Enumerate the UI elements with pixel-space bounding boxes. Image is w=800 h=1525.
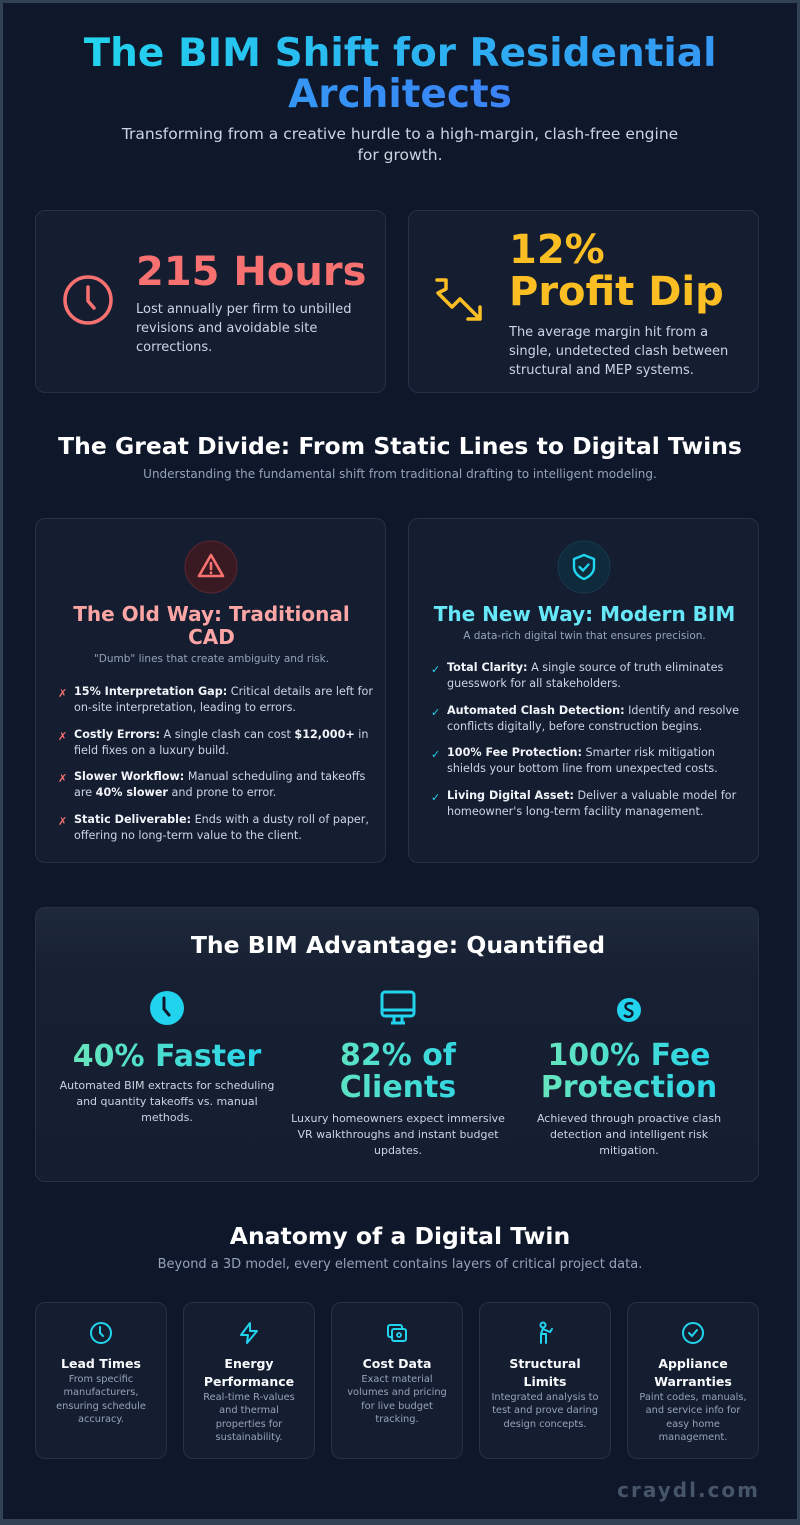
card: energy: Real-time R-values and thermal properties for sustainability.: [203, 1392, 295, 1443]
subtitle: for growth.: [357, 146, 443, 164]
heading: CAD: [188, 625, 235, 649]
card: structural: Integrated analysis to test and prove daring design concepts.: [491, 1392, 599, 1430]
icon: bolt: [240, 1322, 258, 1344]
tagline: "Dumb" lines that create ambiguity and risk.: [94, 653, 329, 665]
stat card: 12% profit dip: [408, 210, 759, 393]
subtitle: Transforming from a creative hurdle to a high-margin, clash-free engine: [122, 125, 678, 143]
stat text: 215 Hours: [136, 249, 366, 295]
list: new way points: Automated Clash Detection: Identify and resolve conflicts digitally, before construction begins.: [447, 704, 739, 732]
icon: monitor: [380, 990, 416, 1024]
stat: 100% fee protection: [537, 998, 721, 1157]
card: structural: Limits: [524, 1374, 566, 1389]
heading: The BIM Advantage: Quantified: [191, 931, 605, 959]
list: new way points: ✓: [431, 748, 440, 761]
watermark: craydl.com: [617, 1478, 760, 1502]
stat: 40% faster: 40% Faster: [73, 1039, 261, 1074]
list: old way points: ✗: [58, 772, 67, 785]
icon: clock: [90, 1322, 112, 1344]
list: new way points: ✓: [431, 706, 440, 718]
list: old way points: Static Deliverable: Ends with a dusty roll of paper, offering no long-term value to the client.: [74, 812, 369, 842]
list: old way points: ✗: [58, 730, 67, 742]
icon: clock filled: [150, 991, 184, 1025]
stat text: Profit Dip: [509, 269, 724, 315]
card: appliance: Appliance Warranties: [654, 1356, 732, 1389]
card: energy: Energy Performance: [204, 1356, 294, 1389]
title: Architects: [288, 72, 512, 117]
card: energy: [183, 1302, 315, 1459]
stat: 82% of clients: 82% of: [340, 1038, 456, 1073]
stat text: The average margin hit from a single, undetected clash between structural and MEP systems.: [509, 325, 728, 378]
list: old way points: ✗: [58, 814, 67, 828]
panel: old way: [35, 518, 386, 863]
stat: 82% of clients: [291, 990, 505, 1157]
stat: 100% fee protection: Achieved through proactive clash detection and intelligent risk mitigation.: [537, 1112, 721, 1157]
list: new way points: [431, 661, 739, 818]
heading: [73, 602, 350, 649]
section subheading: Understanding the fundamental shift from traditional drafting to intelligent modeling.: [143, 467, 657, 481]
card: lead times: From specific manufacturers, ensuring schedule accuracy.: [56, 1374, 146, 1425]
icon: warning: [184, 540, 238, 594]
stat: 100% fee protection: 100% Fee: [547, 1038, 711, 1073]
stat text: Lost annually per firm to unbilled revisions and avoidable site corrections.: [136, 302, 352, 355]
card: cost data: Exact material volumes and pricing for live budget tracking.: [347, 1374, 447, 1425]
icon: clock: [63, 275, 113, 325]
list: new way points: Living Digital Asset: Deliver a valuable model for homeowner's long-term facility management.: [447, 788, 736, 818]
icon: money: [387, 1324, 407, 1342]
icon: trending down: [435, 278, 482, 321]
card: structural: [479, 1302, 611, 1459]
stat: 40% faster: Automated BIM extracts for scheduling and quantity takeoffs vs. manual methods.: [60, 1079, 274, 1124]
card: appliance: Paint codes, manuals, and service info for easy home management.: [639, 1392, 747, 1443]
heading: The Old Way: Traditional: [73, 602, 350, 626]
stat card: 215 hours: [35, 210, 386, 393]
card: lead times: [35, 1302, 167, 1459]
stat text: [136, 249, 366, 355]
icon: check circle: [682, 1322, 704, 1344]
title: [84, 31, 716, 117]
list: old way points: Costly Errors: A single clash can cost $12,000+ in field fixes on a luxury build.: [74, 728, 369, 756]
section subheading: Beyond a 3D model, every element contains layers of critical project data.: [158, 1257, 642, 1272]
list: new way points: 100% Fee Protection: Smarter risk mitigation shields your bottom line from unexpected costs.: [447, 746, 718, 775]
card: lead times: Lead Times: [61, 1356, 141, 1371]
stat: 40% faster: [60, 991, 274, 1124]
list: old way points: ✗: [58, 687, 67, 700]
panel: new way: [408, 518, 759, 863]
section heading: great divide: The Great Divide: From Static Lines to Digital Twins: [58, 432, 742, 460]
stat text: [508, 227, 728, 378]
card: structural: Structural: [509, 1356, 581, 1371]
section heading: anatomy: Anatomy of a Digital Twin: [230, 1222, 570, 1250]
stat: 100% fee protection: Protection: [541, 1070, 717, 1105]
stat: 82% of clients: Luxury homeowners expect immersive VR walkthroughs and instant budget updates.: [291, 1112, 505, 1157]
icon: figure: [540, 1322, 553, 1344]
panel: BIM advantage: [35, 907, 759, 1182]
stat: 82% of clients: Clients: [340, 1070, 456, 1105]
list: new way points: Total Clarity: A single source of truth eliminates guesswork for all stakeholders.: [447, 661, 723, 690]
list: old way points: 15% Interpretation Gap: Critical details are left for on-site interpretation, leading to errors.: [74, 685, 373, 714]
list: old way points: Slower Workflow: Manual scheduling and takeoffs are 40% slower and prone to error.: [74, 770, 365, 799]
list: new way points: ✓: [431, 790, 440, 804]
card: cost data: Cost Data: [363, 1356, 431, 1371]
card: cost data: [331, 1302, 463, 1459]
list: new way points: ✓: [431, 663, 440, 676]
title: The BIM Shift for Residential: [84, 31, 716, 76]
card: appliance: [627, 1302, 759, 1459]
icon: dollar coin: [617, 998, 641, 1022]
subtitle: [122, 125, 678, 164]
stat text: 12%: [509, 227, 605, 273]
icon: shield: [558, 540, 610, 594]
list: old way points: [58, 685, 373, 842]
tagline: A data-rich digital twin that ensures precision.: [463, 630, 706, 642]
heading: The New Way: Modern BIM: [434, 602, 735, 626]
